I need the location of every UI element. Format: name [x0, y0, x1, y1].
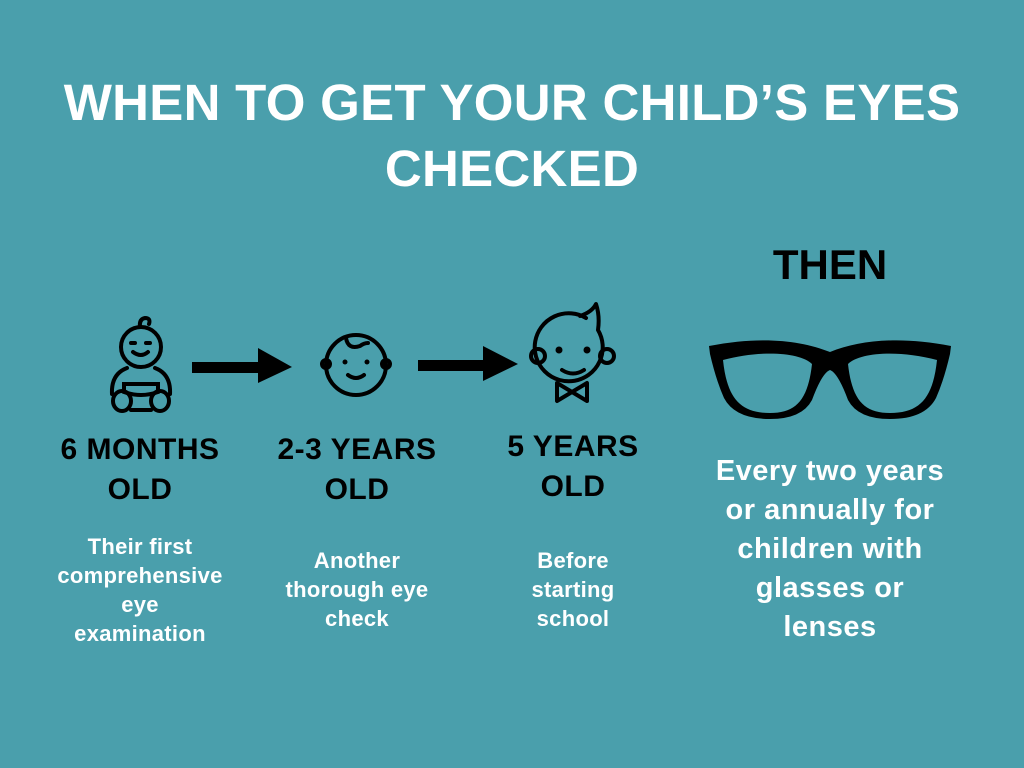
- title: [64, 74, 960, 197]
- text: then: lenses: [783, 611, 877, 643]
- text: then: Every two years: [716, 455, 944, 487]
- label: 5 years: OLD: [541, 470, 605, 503]
- text: second: check: [325, 606, 389, 631]
- label: 2-3 years: 2-3 YEARS: [277, 433, 436, 466]
- text: second: thorough eye: [286, 577, 428, 602]
- text: first: [57, 534, 223, 646]
- label: 2-3 years: OLD: [325, 473, 389, 506]
- heading: then: THEN: [773, 241, 887, 288]
- text: third: [531, 548, 615, 631]
- text: third: starting: [531, 577, 615, 602]
- text: third: school: [537, 606, 609, 631]
- label: 6 months: OLD: [108, 473, 172, 506]
- text: first: Their first: [88, 534, 192, 559]
- label: 5 years: [507, 430, 639, 503]
- text: third: Before: [537, 548, 609, 573]
- label: 6 months: [60, 433, 220, 506]
- text: second: Another: [314, 548, 400, 573]
- label: 2-3 years: [277, 433, 436, 506]
- text: then: or annually for: [726, 494, 934, 526]
- arrow 2: [418, 346, 518, 381]
- label: 5 years: 5 YEARS: [507, 430, 639, 463]
- text: then: children with: [737, 533, 923, 565]
- icon: child with bowtie: [531, 304, 614, 401]
- label: 6 months: 6 MONTHS: [60, 433, 220, 466]
- text: first: examination: [74, 621, 206, 646]
- icon: baby sitting: [112, 318, 170, 411]
- text: first: comprehensive: [57, 563, 223, 588]
- text: second: [286, 548, 428, 631]
- arrow 1: [192, 348, 292, 383]
- title: WHEN TO GET YOUR CHILD’S EYES: [64, 74, 960, 131]
- text: then: [716, 455, 944, 643]
- title: CHECKED: [385, 140, 639, 197]
- text: first: eye: [121, 592, 159, 617]
- text: then: glasses or: [756, 572, 904, 604]
- icon: toddler face: [322, 335, 390, 395]
- icon: glasses: [709, 340, 951, 419]
